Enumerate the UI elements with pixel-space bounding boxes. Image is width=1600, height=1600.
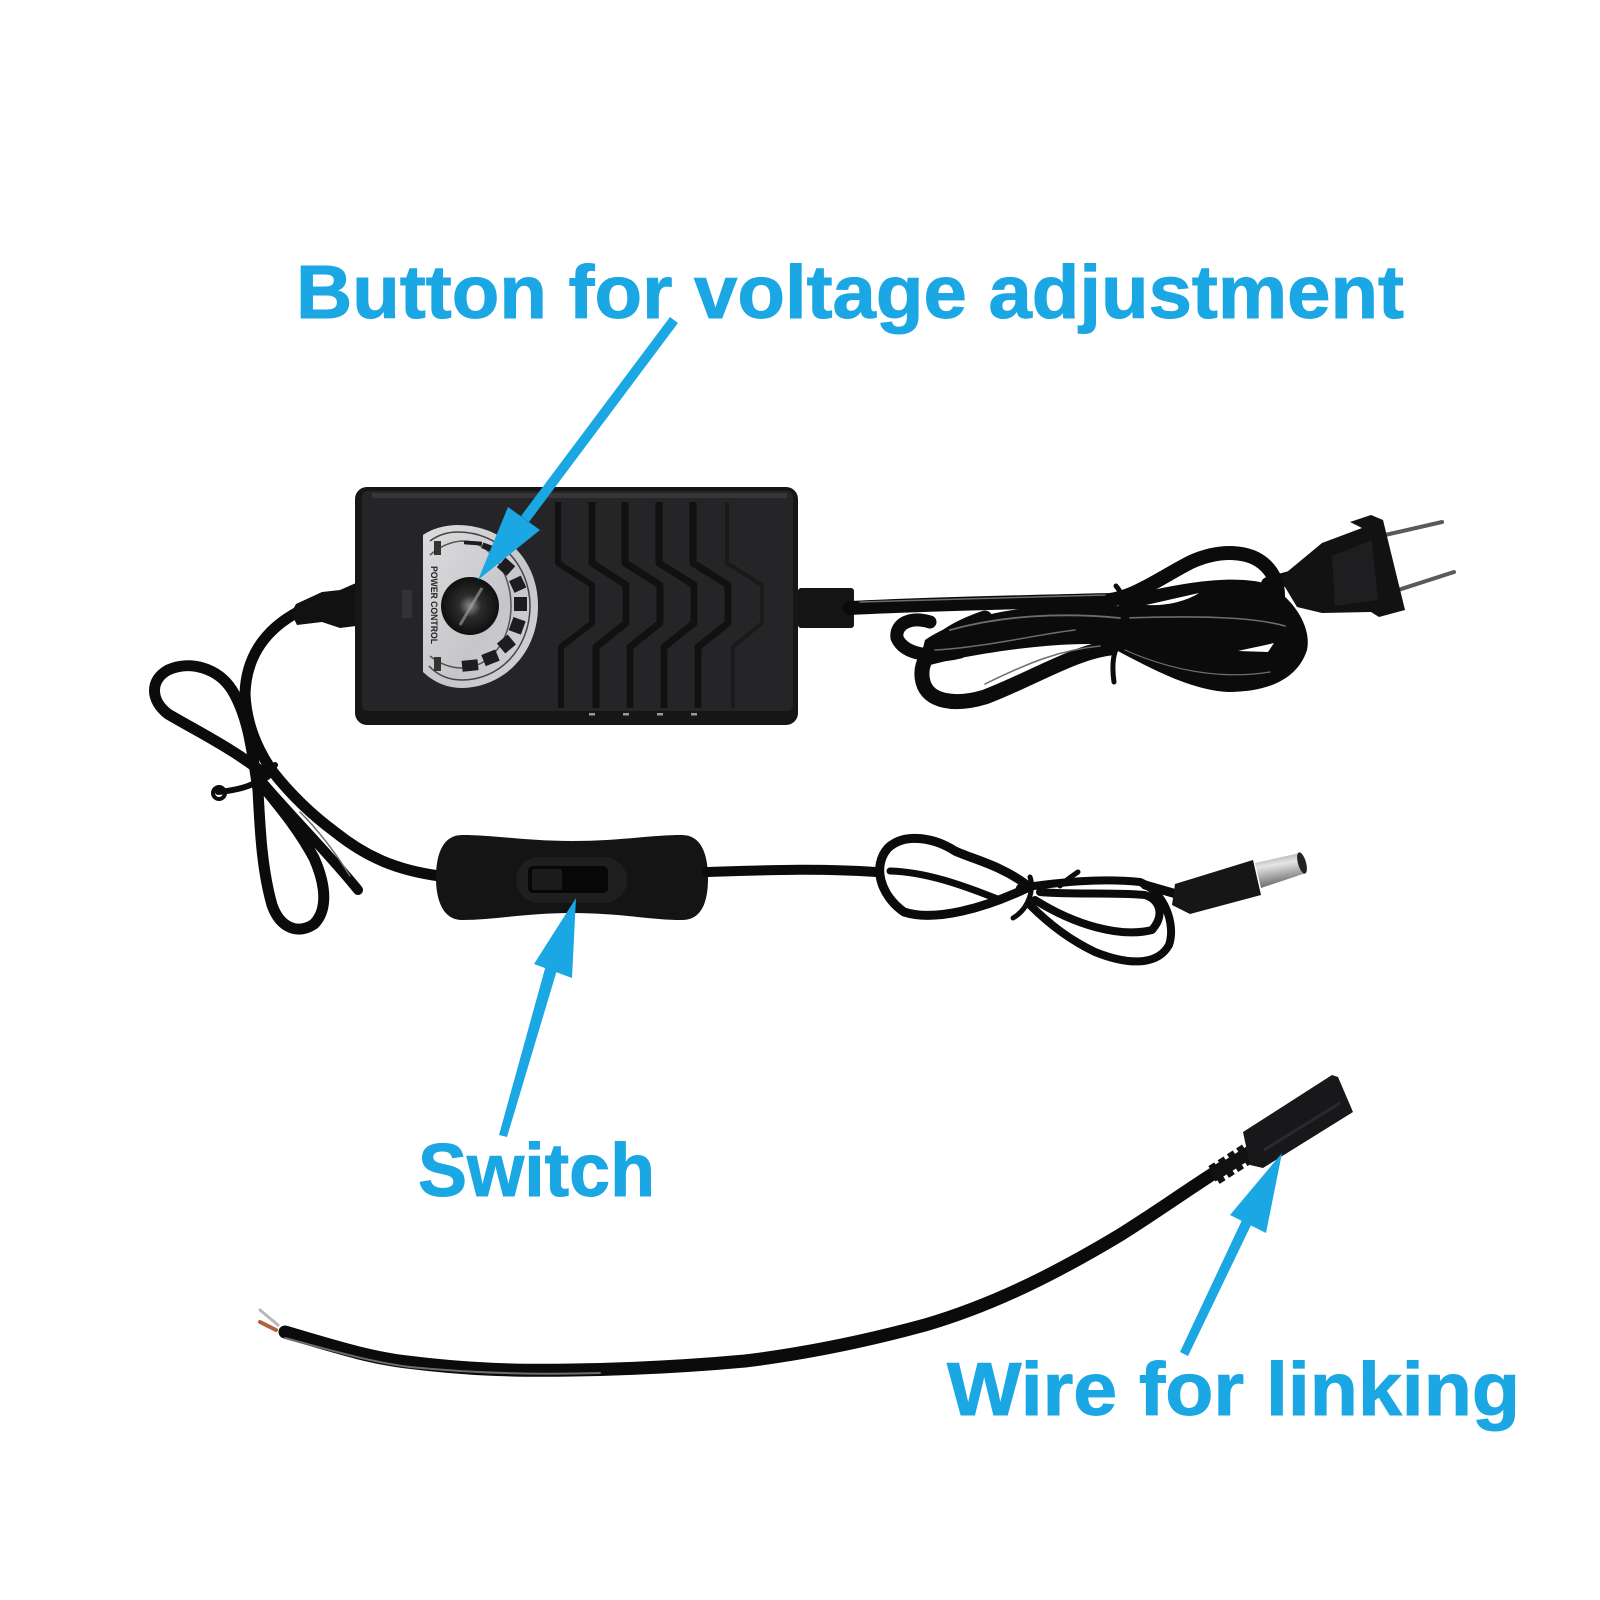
left strain relief xyxy=(291,583,356,628)
power adapter body xyxy=(355,487,798,725)
coiled mains cord xyxy=(850,553,1308,702)
cord mass, right lobe xyxy=(1112,580,1308,692)
arrow: switch xyxy=(499,898,576,1137)
mains plug xyxy=(1268,515,1454,617)
DC barrel plug xyxy=(1172,851,1309,914)
coiled low-voltage cable xyxy=(706,838,1180,961)
vent ridges xyxy=(558,502,762,708)
label: wire for linking: Wire for linking xyxy=(947,1347,1520,1431)
arrow: button for voltage adjustment xyxy=(478,317,678,580)
left cord from adapter to switch with tied loop xyxy=(154,613,440,929)
icon: twist tie on left cord xyxy=(213,765,275,799)
icon: cable twist tie xyxy=(1013,872,1078,918)
dial plate with scale xyxy=(423,525,538,688)
right strain relief xyxy=(798,588,854,628)
cord mass, left lobe xyxy=(918,606,1120,668)
label: button for voltage adjustment: Button for voltage adjustment xyxy=(296,250,1404,334)
white gaps between cord strands xyxy=(1146,593,1199,605)
icon: cord twist tie xyxy=(1113,586,1127,682)
arrow: wire for linking xyxy=(1180,1153,1282,1356)
inline switch xyxy=(436,835,708,920)
DC socket connector xyxy=(1212,1075,1353,1176)
linking wire xyxy=(260,1168,1222,1374)
voltage knob xyxy=(441,577,499,635)
dial caption: POWER CONTROL xyxy=(429,566,439,644)
indicator light xyxy=(402,590,412,618)
scale segments xyxy=(434,540,527,672)
label: switch: Switch xyxy=(418,1128,655,1212)
